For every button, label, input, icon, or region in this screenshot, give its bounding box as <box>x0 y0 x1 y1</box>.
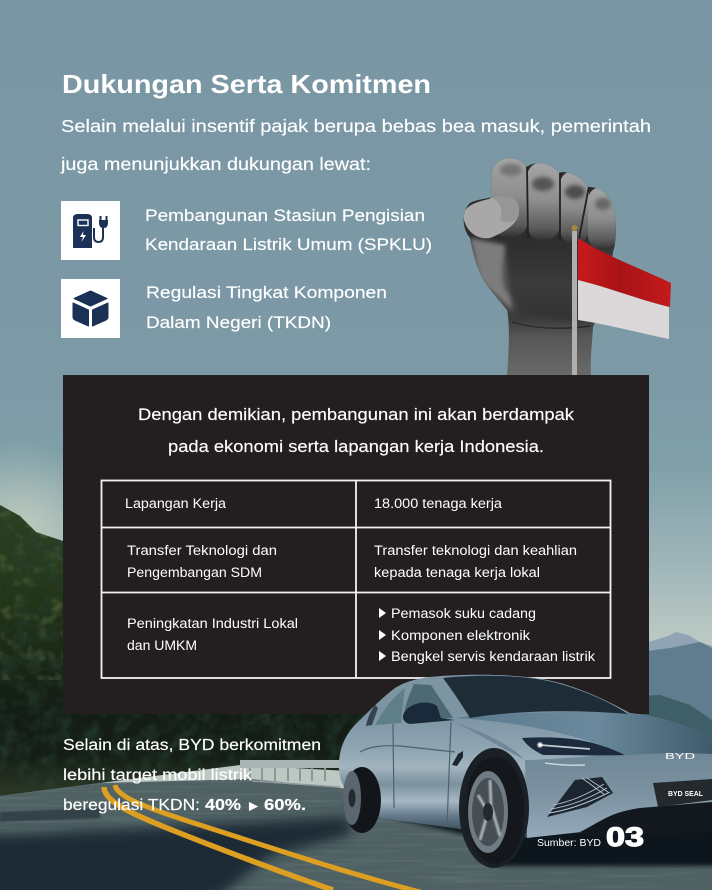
list item: TKDN <box>146 284 387 332</box>
windshield <box>443 676 628 718</box>
list item: SPKLU <box>145 207 432 254</box>
closing statement <box>63 737 321 814</box>
intro text: Selain melalui insentif pajak berupa bebas bea masuk, pemerintah <box>61 116 651 136</box>
car body <box>339 675 712 838</box>
headlight <box>522 737 625 755</box>
icon: Indonesian flag on pole <box>572 225 671 375</box>
panel heading <box>138 405 575 456</box>
row: Peningkatan Industri Lokal: Bengkel servis kendaraan listrik <box>391 649 595 664</box>
panel heading: pada ekonomi serta lapangan kerja Indonesia. <box>168 437 544 456</box>
intro text: juga menunjukkan dukungan lewat: <box>60 154 371 174</box>
row: Transfer Teknologi <box>127 543 577 580</box>
table <box>101 480 611 678</box>
closing statement: beregulasi TKDN: <box>63 797 200 814</box>
row: Transfer Teknologi: Transfer Teknologi dan <box>127 543 277 558</box>
row: Transfer Teknologi: Pengembangan SDM <box>127 565 262 580</box>
number plate <box>653 779 712 807</box>
icon: EV charging station <box>61 201 120 260</box>
door lines <box>360 722 455 826</box>
number plate: BYD SEAL <box>668 791 704 798</box>
panel: impact <box>63 375 649 714</box>
intro text <box>60 116 651 174</box>
source credit: Sumber: BYD <box>537 837 601 849</box>
fender and bumper <box>455 722 712 838</box>
row: Lapangan Kerja <box>125 496 503 511</box>
closing statement: 40% <box>205 797 241 814</box>
row: Peningkatan Industri Lokal: Pemasok suku cadang <box>391 606 536 621</box>
mirror <box>403 703 455 724</box>
guardrail <box>240 760 340 787</box>
road yellow lines <box>104 785 440 890</box>
row: Peningkatan Industri Lokal: Komponen elektronik <box>391 628 530 643</box>
list item: TKDN: Regulasi Tingkat Komponen <box>146 284 387 302</box>
hood <box>455 712 712 755</box>
background: sky, hills and road <box>0 443 712 890</box>
title: Dukungan Serta Komitmen <box>62 69 431 99</box>
row: Transfer Teknologi: Transfer teknologi dan keahlian <box>374 543 577 558</box>
list item: SPKLU: Pembangunan Stasiun Pengisian <box>145 207 425 225</box>
closing statement: lebihi target mobil listrik <box>63 767 252 784</box>
panel heading: Dengan demikian, pembangunan ini akan berdampak <box>138 405 575 424</box>
row: Peningkatan Industri Lokal: dan UMKM <box>127 638 197 653</box>
row: Lapangan Kerja: Lapangan Kerja <box>125 496 227 511</box>
list item: SPKLU: Kendaraan Listrik Umum (SPKLU) <box>145 236 432 254</box>
grille vent <box>547 777 613 817</box>
closing statement: Selain di atas, BYD berkomitmen <box>63 737 321 754</box>
nose badge: BYD <box>665 752 695 761</box>
row: Peningkatan Industri Lokal: Peningkatan Industri Lokal <box>127 616 298 631</box>
closing statement: 60%. <box>264 797 306 814</box>
row: Transfer Teknologi: kepada tenaga kerja lokal <box>374 565 540 580</box>
list item: TKDN: Dalam Negeri (TKDN) <box>146 314 331 332</box>
icon: component cube <box>61 279 120 338</box>
front wheel <box>467 757 524 864</box>
page number: 03 <box>606 822 644 852</box>
row: Lapangan Kerja: 18.000 tenaga kerja <box>374 496 503 511</box>
lower intake <box>580 802 712 838</box>
side windows <box>403 684 453 720</box>
car: BYD Seal <box>339 675 712 868</box>
row: Peningkatan Industri Lokal <box>127 606 595 664</box>
wheel arch <box>459 748 529 868</box>
icon: raised fist <box>464 158 616 375</box>
rear wheel <box>343 767 381 833</box>
